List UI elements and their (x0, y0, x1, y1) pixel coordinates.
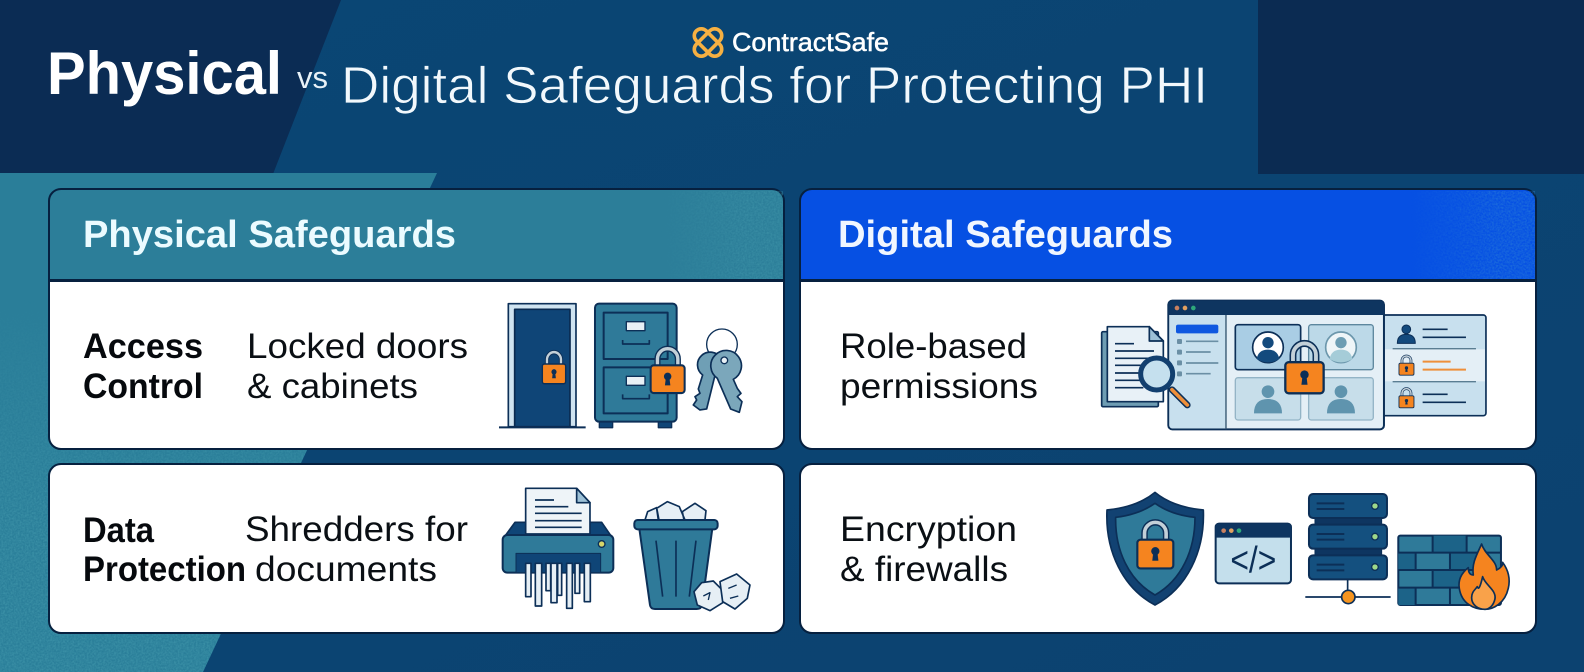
title (47, 40, 1208, 115)
panel: role-based permissions card (800, 281, 1536, 449)
icon: door with lock (499, 304, 586, 427)
text: encryption and firewalls: & firewalls (840, 550, 1008, 589)
icon: magnifying glass (1141, 358, 1187, 405)
panel: data protection card (49, 464, 784, 633)
text: role-based permissions: permissions (840, 367, 1038, 406)
icon: brick firewall with flame (1398, 536, 1509, 609)
icon: app window with user grid (1168, 301, 1384, 429)
header dark block right (1258, 0, 1584, 174)
icon: shredder (503, 488, 613, 608)
logo wordmark: ContractSafe (732, 27, 889, 57)
text: encryption and firewalls: Encryption (840, 510, 1017, 549)
label: data protection: Data (83, 511, 154, 550)
text: shredders for documents: Shredders for (245, 510, 468, 549)
icon: side permissions list (1373, 315, 1486, 416)
header grain (714, 191, 783, 279)
teal background shape (0, 173, 437, 672)
icon: shield with lock (1107, 492, 1203, 605)
text: locked doors and cabinets: Locked doors (247, 327, 468, 366)
label: access control: Access (83, 327, 203, 366)
icon: server stack (1305, 494, 1391, 604)
icon: document with magnifier (1102, 327, 1163, 407)
panel: encryption and firewalls card (800, 464, 1536, 633)
heading: digital safeguards: Digital Safeguards (838, 214, 1173, 256)
icon: code window: </> (1230, 538, 1276, 580)
header dark band left (0, 0, 341, 174)
title word: Physical: Physical (47, 40, 282, 107)
title word: vs: vs (297, 60, 328, 95)
header grain (1440, 191, 1535, 279)
panel: digital safeguards header (800, 189, 1536, 280)
panel: access control card (49, 281, 784, 449)
icon: code window (1216, 524, 1291, 583)
text: shredders for documents: documents (255, 550, 437, 589)
logo: ContractSafe (691, 26, 889, 59)
icon: trash bin with crumpled paper (634, 502, 750, 611)
text: role-based permissions: Role-based (840, 327, 1027, 366)
panel: physical safeguards header (49, 189, 784, 280)
title words: digital safeguards: Digital Safeguards for Protecting PHI (341, 57, 1208, 115)
label: data protection: Protection (83, 550, 246, 589)
icon: logo knot (691, 26, 725, 59)
heading: physical safeguards: Physical Safeguards (83, 214, 456, 256)
icon: filing cabinet with lock (595, 304, 685, 428)
label: access control: Control (83, 367, 203, 406)
text: locked doors and cabinets: & cabinets (247, 367, 418, 406)
icon: keys (693, 329, 742, 412)
